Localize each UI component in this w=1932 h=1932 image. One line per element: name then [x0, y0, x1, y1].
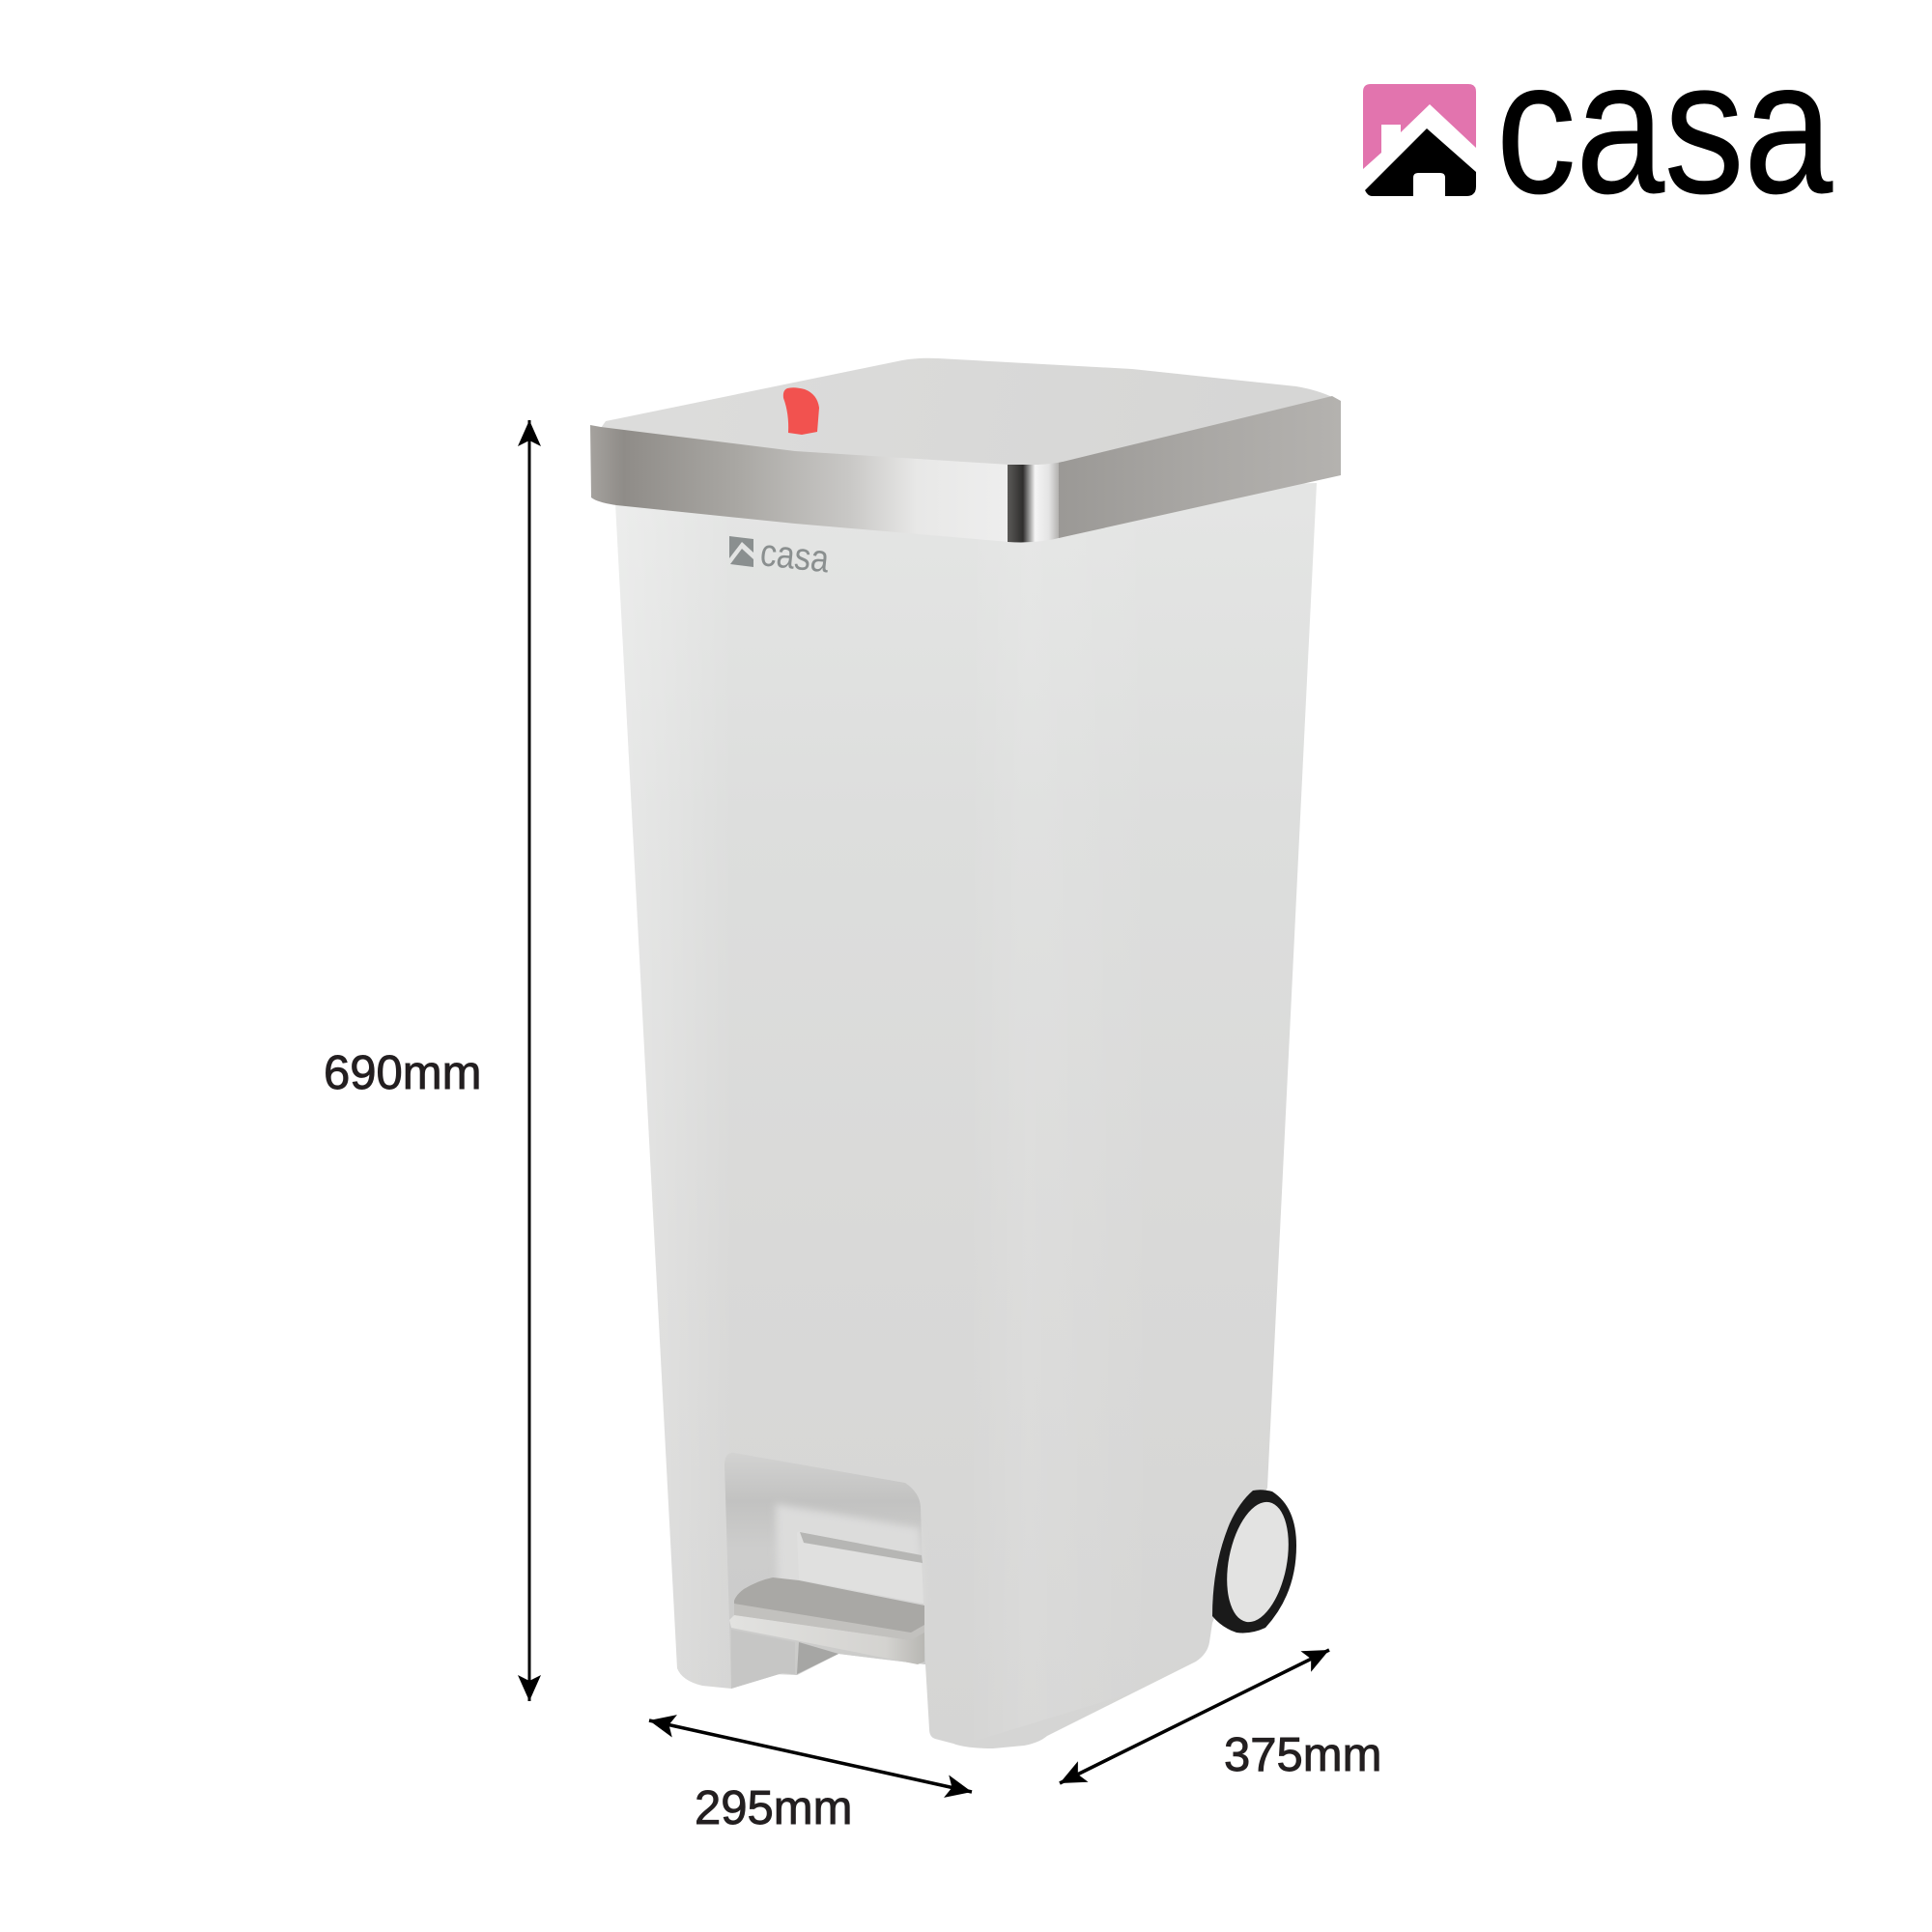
steel rim: [590, 396, 1341, 542]
red lid tab: [783, 387, 819, 435]
bin body: [615, 483, 1317, 1748]
width label: 295mm: [695, 1782, 852, 1834]
logo icon: pink roof square: [1363, 84, 1476, 169]
foot pedal: [734, 1577, 924, 1640]
rim corner: [1008, 462, 1063, 542]
depth arrow: [1060, 1650, 1329, 1783]
wheel: [1212, 1490, 1297, 1633]
inner panel: [776, 1504, 924, 1605]
logo: casa: [1363, 21, 1833, 233]
small logo icon: [729, 536, 753, 558]
rim side: [1059, 396, 1341, 538]
rubbish bin product: [590, 358, 1341, 1748]
lid: [601, 358, 1334, 469]
pedal recess: [724, 1453, 925, 1689]
small logo text: casa: [758, 531, 832, 581]
width arrow: [649, 1720, 972, 1792]
rim front: [590, 425, 1009, 542]
pedal arm: [797, 1532, 923, 1604]
height label: 690mm: [324, 1047, 481, 1099]
under-pedal shadow: [731, 1630, 795, 1689]
logo icon: black house: [1365, 128, 1476, 196]
small casa logo on bin: [729, 531, 832, 581]
depth label: 375mm: [1224, 1729, 1381, 1781]
logo wordmark: casa: [1496, 21, 1833, 233]
height arrow: [527, 420, 531, 1701]
